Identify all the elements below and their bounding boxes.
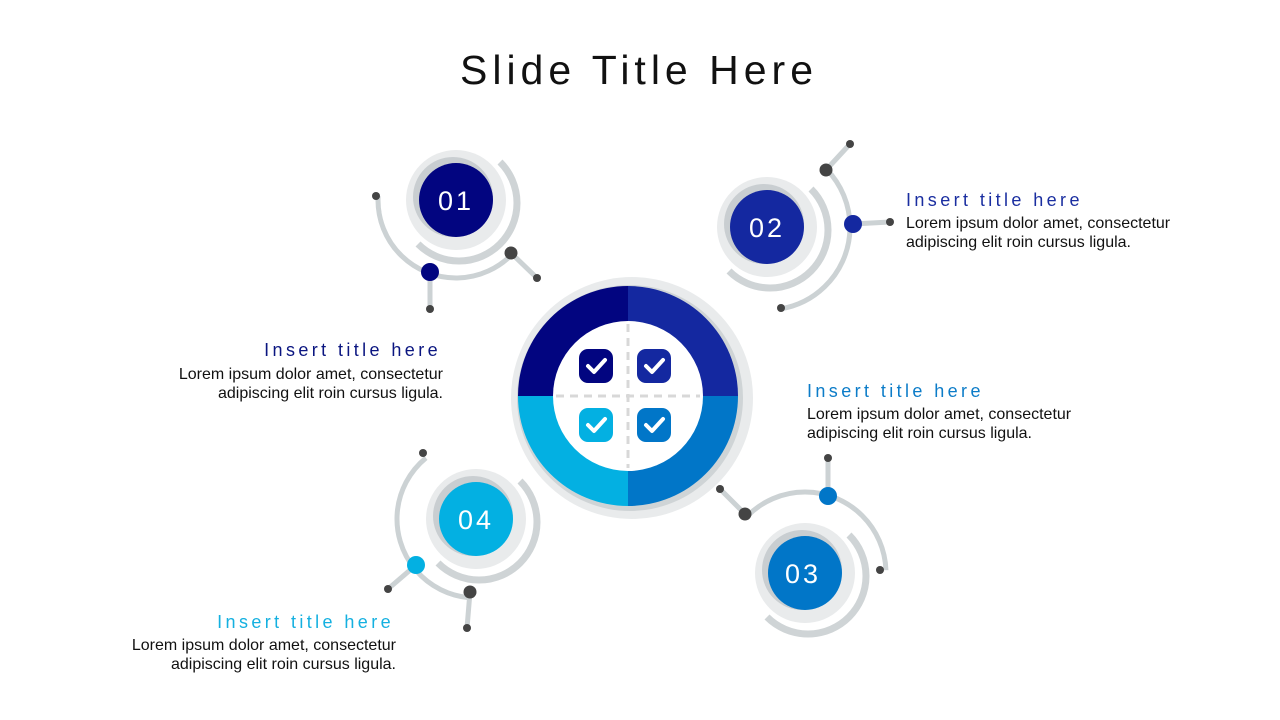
node 03 bbox=[690, 454, 920, 688]
node 02: 02 bbox=[749, 213, 785, 243]
title: Slide Title Here bbox=[460, 47, 818, 93]
node 02 bbox=[650, 110, 894, 344]
text block 01: adipiscing elit roin cursus ligula. bbox=[218, 385, 443, 402]
text block 03: Lorem ipsum dolor amet, consectetur bbox=[807, 406, 1072, 423]
node 04 bbox=[384, 433, 562, 632]
text block 04: adipiscing elit roin cursus ligula. bbox=[171, 656, 396, 673]
text block 03 bbox=[807, 381, 1072, 442]
node 01: 01 bbox=[438, 186, 474, 216]
text block 01: Lorem ipsum dolor amet, consectetur bbox=[179, 366, 444, 383]
node 01 bbox=[346, 90, 566, 313]
text block 02: Insert title here bbox=[906, 190, 1083, 210]
text block 02 bbox=[906, 190, 1171, 251]
text block 02: adipiscing elit roin cursus ligula. bbox=[906, 234, 1131, 251]
text block 01: Insert title here bbox=[264, 340, 441, 360]
text block 04: Lorem ipsum dolor amet, consectetur bbox=[132, 637, 397, 654]
icon: check boxes bbox=[579, 349, 671, 442]
text block 04: Insert title here bbox=[217, 612, 394, 632]
text block 04 bbox=[132, 612, 397, 673]
text block 02: Lorem ipsum dolor amet, consectetur bbox=[906, 215, 1171, 232]
node 04: 04 bbox=[458, 505, 494, 535]
node 03: 03 bbox=[785, 559, 821, 589]
text block 01 bbox=[179, 340, 444, 402]
text block 03: Insert title here bbox=[807, 381, 984, 401]
text block 03: adipiscing elit roin cursus ligula. bbox=[807, 425, 1032, 442]
center chart bbox=[511, 277, 753, 519]
